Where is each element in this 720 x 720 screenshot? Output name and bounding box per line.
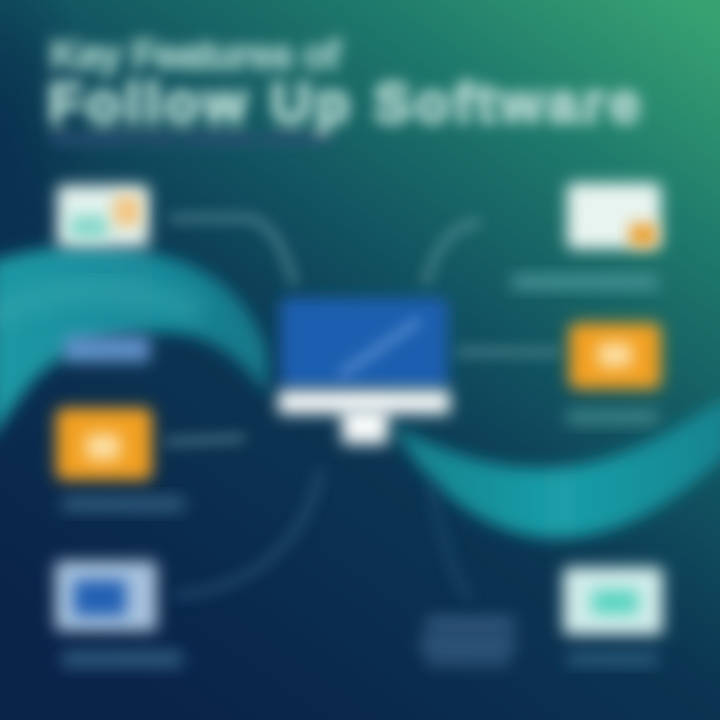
feature: top left: [57, 185, 149, 247]
wave: left: [0, 246, 268, 440]
monitor bezel: [278, 390, 450, 414]
feature: top right: [567, 183, 661, 249]
title: Key Features of: [50, 33, 341, 77]
feature label: bottom centre: [421, 618, 515, 664]
envelope: [86, 434, 120, 460]
feature label: top right: [512, 275, 658, 289]
feature label: bottom left: [62, 651, 182, 667]
feature label: middle right: [567, 410, 658, 424]
teal inset: [592, 590, 638, 614]
connector lines: [165, 218, 560, 600]
wave: right: [392, 395, 720, 538]
icon card: [57, 185, 149, 247]
feature label: middle left: [62, 497, 184, 511]
icon accent teal: [70, 216, 108, 238]
feature: middle left orange icon: [56, 408, 152, 480]
feature label: bottom right: [568, 653, 658, 665]
central monitor icon: [278, 298, 450, 444]
title: Follow Up Software: [48, 71, 640, 134]
feature: left label: [64, 336, 150, 362]
orange corner: [630, 224, 656, 246]
envelope: [598, 343, 632, 367]
monitor chart line: [340, 320, 420, 375]
wave highlight: left: [0, 291, 200, 320]
screen inset: [74, 580, 126, 616]
title: [48, 33, 640, 147]
feature: bottom left: [55, 561, 157, 631]
monitor stand: [342, 408, 388, 444]
title: Streamline your customer outreach: [50, 130, 330, 147]
background left shade: [0, 0, 130, 300]
icon accent orange: [114, 196, 140, 226]
monitor screen: [280, 298, 448, 388]
feature: bottom right: [563, 567, 663, 635]
feature: middle right orange icon: [569, 323, 661, 389]
